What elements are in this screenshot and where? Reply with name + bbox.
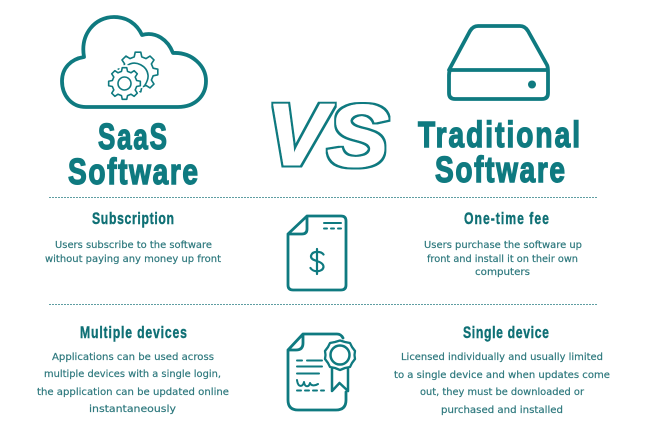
- panel: traditional one-time fee: front and install it on their own: [427, 254, 578, 265]
- panel: SaaS subscription: Users subscribe to the software: [55, 240, 212, 251]
- panel: traditional single device: Licensed individually and usually limited: [401, 352, 603, 363]
- icon: invoice with dollar: [288, 216, 346, 290]
- title: Traditional Software: Software: [435, 150, 565, 190]
- icon: cloud with gears: [62, 17, 206, 107]
- panel: SaaS multiple devices: multiple devices with a single login,: [44, 369, 221, 380]
- panel: SaaS subscription: without paying any money up front: [45, 254, 221, 265]
- panel: traditional one-time fee: computers: [475, 267, 530, 278]
- panel: traditional single device: to a single device and when updates come: [394, 370, 610, 381]
- title: SaaS Software: Software: [68, 152, 198, 192]
- icon: server drive: [449, 26, 548, 99]
- icon: certificate with rosette: [288, 334, 355, 410]
- panel: SaaS multiple devices: Applications can be used across: [52, 352, 214, 363]
- divider top: [49, 196, 598, 198]
- divider bottom: [49, 304, 598, 306]
- panel: SaaS subscription: Subscription: [92, 210, 174, 229]
- panel: traditional one-time fee: [424, 210, 582, 278]
- title: Traditional Software: Traditional: [418, 115, 580, 155]
- panel: traditional one-time fee: Users purchase the software up: [424, 240, 582, 251]
- panel: SaaS multiple devices: Multiple devices: [80, 324, 187, 343]
- title: VS: S: [327, 86, 389, 185]
- panel: traditional single device: out, they must be downloaded or: [420, 387, 584, 398]
- panel: traditional single device: [394, 324, 610, 416]
- title: SaaS Software: [68, 117, 198, 192]
- title: Traditional Software: [418, 115, 580, 190]
- panel: SaaS multiple devices: the application can be updated online: [37, 387, 229, 398]
- panel: traditional single device: purchased and installed: [441, 405, 563, 416]
- panel: traditional one-time fee: One-time fee: [464, 210, 549, 229]
- panel: traditional single device: Single device: [463, 324, 549, 343]
- panel: SaaS multiple devices: [37, 324, 229, 415]
- title: VS: [266, 85, 389, 185]
- title: SaaS Software: SaaS: [98, 117, 167, 157]
- panel: SaaS subscription: [45, 210, 221, 265]
- panel: SaaS multiple devices: instantaneously: [89, 404, 176, 415]
- title: VS: V: [266, 85, 335, 184]
